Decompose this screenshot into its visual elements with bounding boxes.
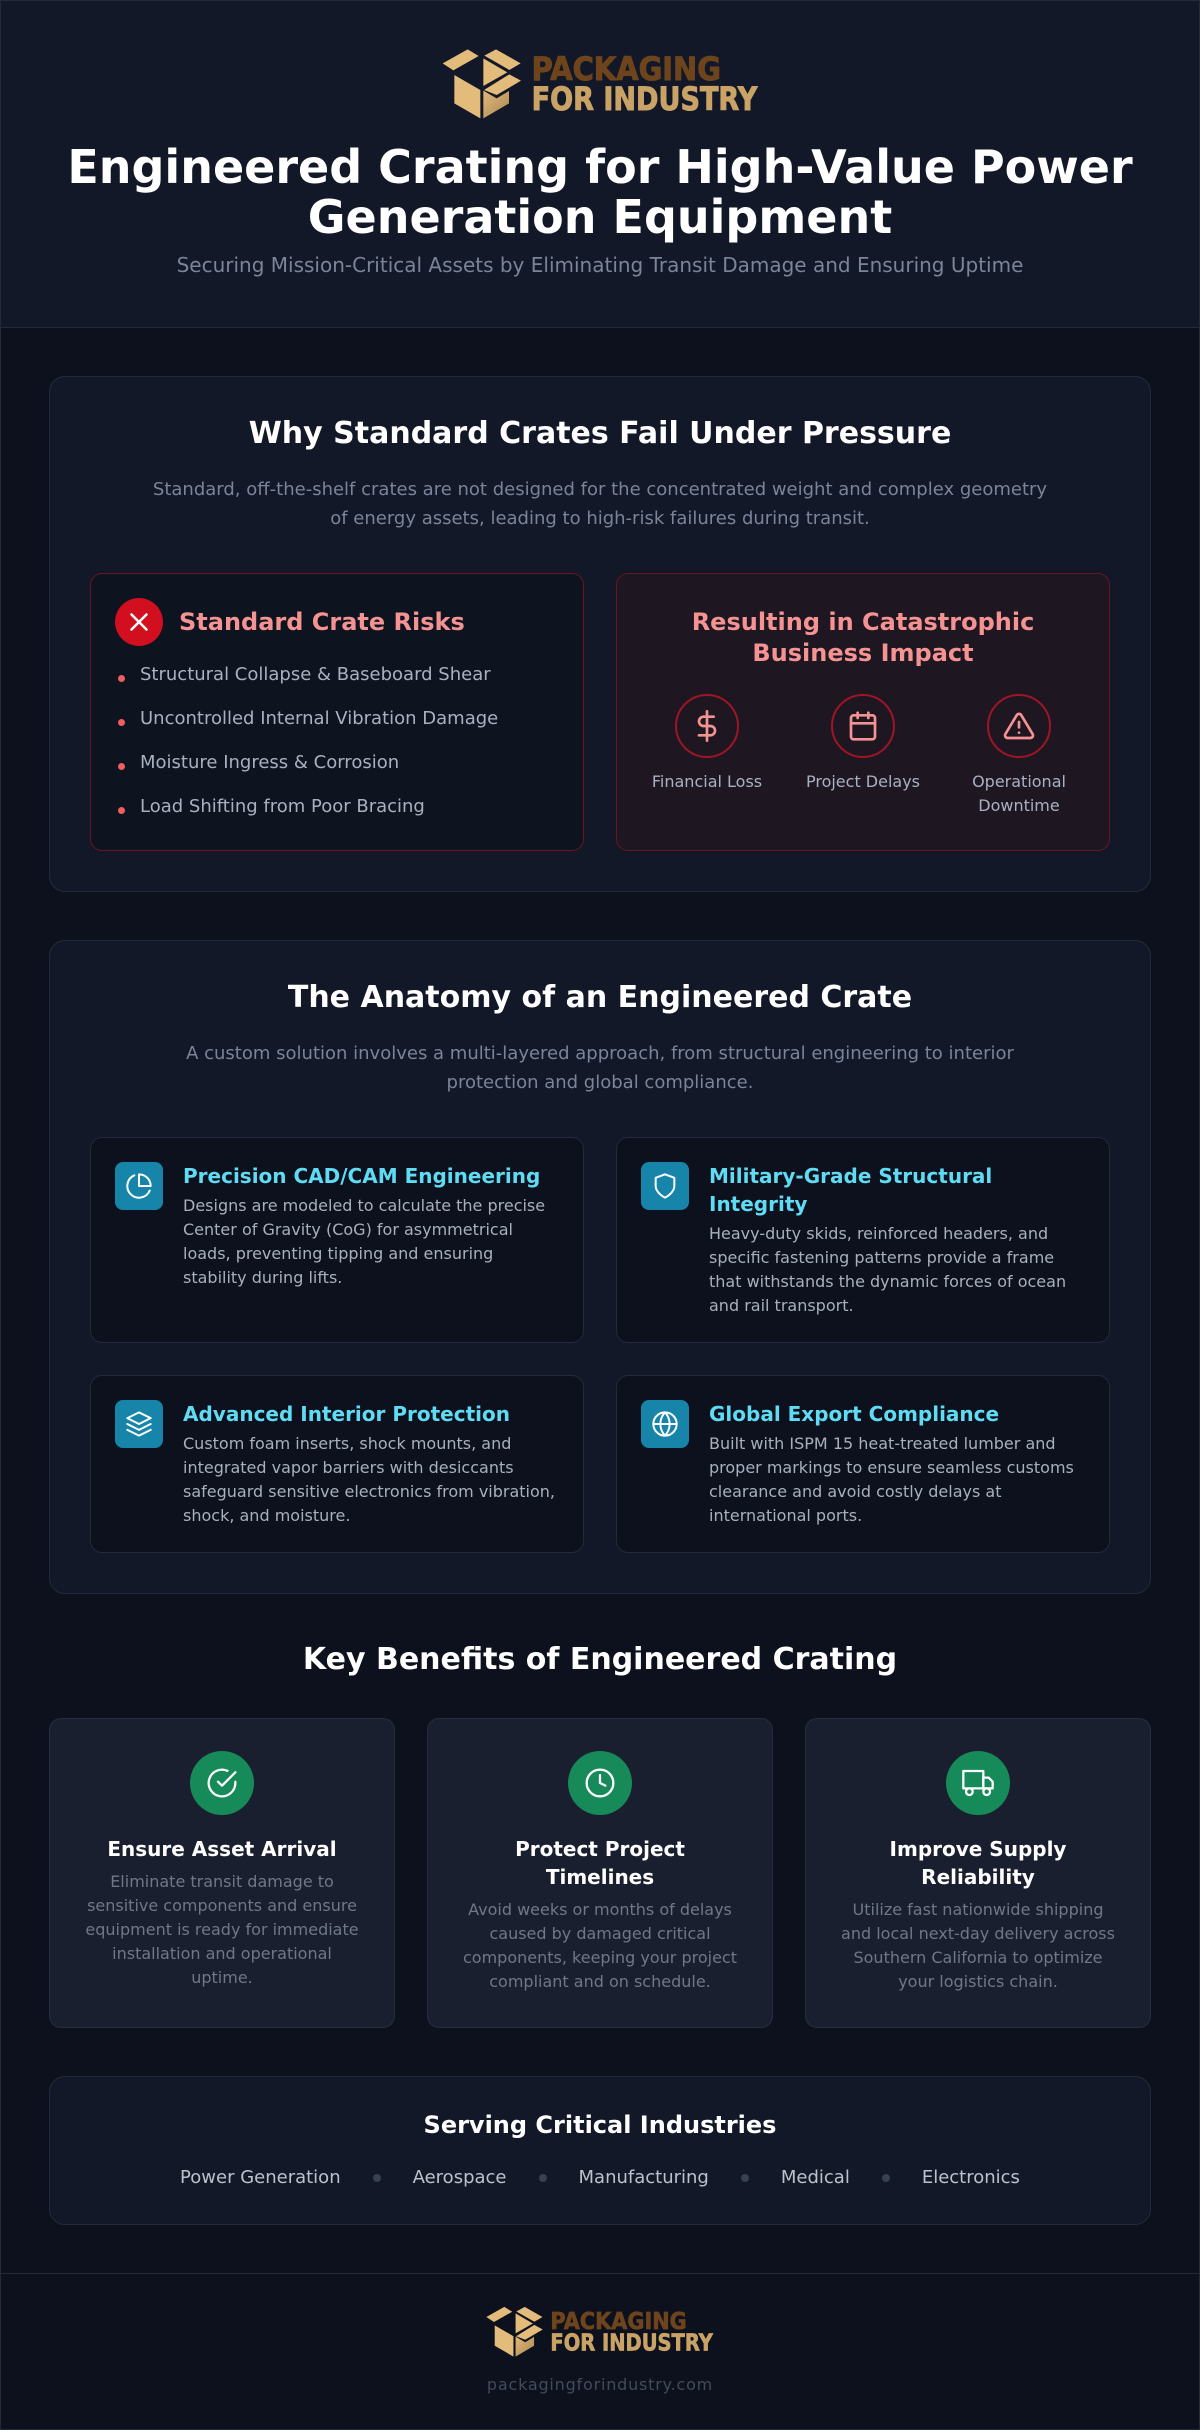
- feature text: Center of Gravity (CoG) for asymmetrical: [183, 1220, 513, 1239]
- benefit text: compliant and on schedule.: [489, 1972, 711, 1991]
- feature text: Global Export Compliance: [709, 1402, 999, 1426]
- feature text: loads, preventing tipping and ensuring: [183, 1244, 493, 1263]
- benefit text: Avoid weeks or months of delays: [468, 1900, 732, 1919]
- benefit text: caused by damaged critical: [489, 1924, 711, 1943]
- panel: business impact: [616, 573, 1110, 851]
- intro text: Standard, off-the-shelf crates are not designed for the concentrated weight and complex geometry: [153, 479, 1047, 500]
- feature text: Built with ISPM 15 heat-treated lumber and: [709, 1434, 1056, 1453]
- benefit text: Eliminate transit damage to: [110, 1872, 334, 1891]
- icon: truck: [946, 1751, 1010, 1815]
- industries list: Electronics: [922, 2167, 1020, 2188]
- benefit: protect project timelines: [427, 1718, 773, 2028]
- impact: operational downtime: Downtime: [978, 796, 1060, 815]
- title: Generation Equipment: [308, 190, 892, 244]
- feature text: that withstands the dynamic forces of ocean: [709, 1272, 1066, 1291]
- heading: Serving Critical Industries: [424, 2111, 776, 2139]
- feature: military-grade: [616, 1137, 1110, 1343]
- panel: standard crate risks: [90, 573, 584, 851]
- impact: financial loss: Financial Loss: [652, 772, 762, 791]
- benefit text: and local next-day delivery across: [841, 1924, 1115, 1943]
- icon: globe: [641, 1400, 689, 1448]
- panel: why standard crates fail: [49, 376, 1151, 892]
- icon: check circle: [190, 1751, 254, 1815]
- feature text: specific fastening patterns provide a frame: [709, 1248, 1054, 1267]
- website url: packagingforindustry.com: [487, 2375, 713, 2394]
- subtitle: Securing Mission-Critical Assets by Eliminating Transit Damage and Ensuring Uptime: [177, 253, 1023, 277]
- benefit text: [85, 1837, 359, 1987]
- feature: precision CAD/CAM: [90, 1137, 584, 1343]
- footer: [0, 2273, 1200, 2430]
- panel: serving critical industries: [49, 2076, 1151, 2225]
- feature text: stability during lifts.: [183, 1268, 342, 1287]
- impact heading: Business Impact: [752, 639, 974, 667]
- feature text: Heavy-duty skids, reinforced headers, and: [709, 1224, 1048, 1243]
- risks list: Uncontrolled Internal Vibration Damage: [140, 708, 498, 729]
- industries list: Power Generation: [180, 2167, 341, 2188]
- logo: Packaging for Industry: PACKAGING: [532, 50, 721, 88]
- feature text: Advanced Interior Protection: [183, 1402, 510, 1426]
- intro text: of energy assets, leading to high-risk failures during transit.: [330, 508, 870, 529]
- feature text: [709, 1402, 1074, 1525]
- feature text: [183, 1164, 545, 1287]
- intro text: [153, 479, 1047, 529]
- logo: Packaging for Industry: [442, 49, 758, 118]
- feature text: integrated vapor barriers with desiccants: [183, 1458, 514, 1477]
- benefit text: your logistics chain.: [898, 1972, 1058, 1991]
- footer logo: PACKAGING: [551, 2309, 687, 2335]
- risks list: [118, 664, 498, 817]
- heading: key benefits: Key Benefits of Engineered Crating: [303, 1642, 897, 1677]
- title: [67, 140, 1133, 244]
- impact: project delays: Project Delays: [806, 772, 920, 791]
- benefit text: components, keeping your project: [463, 1948, 737, 1967]
- icon: layers: [115, 1400, 163, 1448]
- feature text: Integrity: [709, 1192, 807, 1216]
- icon: pie chart: [115, 1162, 163, 1210]
- feature text: [709, 1164, 1066, 1315]
- feature text: safeguard sensitive electronics from vibration,: [183, 1482, 555, 1501]
- footer logo: [486, 2306, 714, 2357]
- impact heading: Resulting in Catastrophic: [692, 608, 1034, 636]
- impact: operational downtime: Operational: [972, 772, 1066, 791]
- impact: project delays: [806, 694, 920, 791]
- industries list: Manufacturing: [579, 2167, 709, 2188]
- heading: Why Standard Crates Fail Under Pressure: [249, 416, 951, 451]
- benefit text: equipment is ready for immediate: [85, 1920, 359, 1939]
- benefit text: [463, 1837, 737, 1991]
- benefit text: Ensure Asset Arrival: [107, 1837, 337, 1861]
- benefit text: Reliability: [921, 1865, 1035, 1889]
- industries list: Aerospace: [413, 2167, 507, 2188]
- benefit text: uptime.: [191, 1968, 253, 1987]
- feature: export compliance: [616, 1375, 1110, 1553]
- feature text: Custom foam inserts, shock mounts, and: [183, 1434, 511, 1453]
- feature text: shock, and moisture.: [183, 1506, 350, 1525]
- icon: clock: [568, 1751, 632, 1815]
- impact: financial loss: [652, 694, 762, 791]
- heading: The Anatomy of an Engineered Crate: [288, 980, 912, 1015]
- risks list: Structural Collapse & Baseboard Shear: [140, 664, 491, 685]
- risks heading: Standard Crate Risks: [179, 608, 465, 636]
- intro text: A custom solution involves a multi-layered approach, from structural engineering to interior: [186, 1043, 1014, 1064]
- industries list: Medical: [781, 2167, 850, 2188]
- industries list: [180, 2167, 1020, 2188]
- feature text: clearance and avoid costly delays at: [709, 1482, 1002, 1501]
- feature text: [183, 1402, 555, 1525]
- benefit text: Southern California to optimize: [853, 1948, 1102, 1967]
- risks list: Moisture Ingress & Corrosion: [140, 752, 399, 773]
- benefit text: Timelines: [546, 1865, 654, 1889]
- feature: interior protection: [90, 1375, 584, 1553]
- benefit: improve supply reliability: [805, 1718, 1151, 2028]
- benefit text: sensitive components and ensure: [87, 1896, 357, 1915]
- benefit text: Utilize fast nationwide shipping: [853, 1900, 1103, 1919]
- feature text: proper markings to ensure seamless customs: [709, 1458, 1074, 1477]
- feature text: international ports.: [709, 1506, 862, 1525]
- intro text: protection and global compliance.: [447, 1072, 753, 1093]
- title: Engineered Crating for High-Value Power: [67, 140, 1133, 194]
- icon: red x: [115, 598, 163, 646]
- benefit text: Improve Supply: [890, 1837, 1066, 1861]
- header band: [0, 0, 1200, 328]
- feature text: and rail transport.: [709, 1296, 854, 1315]
- impact heading: [692, 608, 1034, 667]
- feature text: Designs are modeled to calculate the precise: [183, 1196, 545, 1215]
- benefit: ensure asset arrival: [49, 1718, 395, 2028]
- icon: shield: [641, 1162, 689, 1210]
- panel: anatomy of an engineered crate: [49, 940, 1151, 1594]
- risks list: Load Shifting from Poor Bracing: [140, 796, 425, 817]
- benefit text: installation and operational: [112, 1944, 332, 1963]
- feature text: Precision CAD/CAM Engineering: [183, 1164, 540, 1188]
- benefit text: Protect Project: [515, 1837, 685, 1861]
- benefit text: [841, 1837, 1115, 1991]
- feature text: Military-Grade Structural: [709, 1164, 992, 1188]
- impact: operational downtime: [972, 694, 1066, 815]
- intro text: [186, 1043, 1014, 1093]
